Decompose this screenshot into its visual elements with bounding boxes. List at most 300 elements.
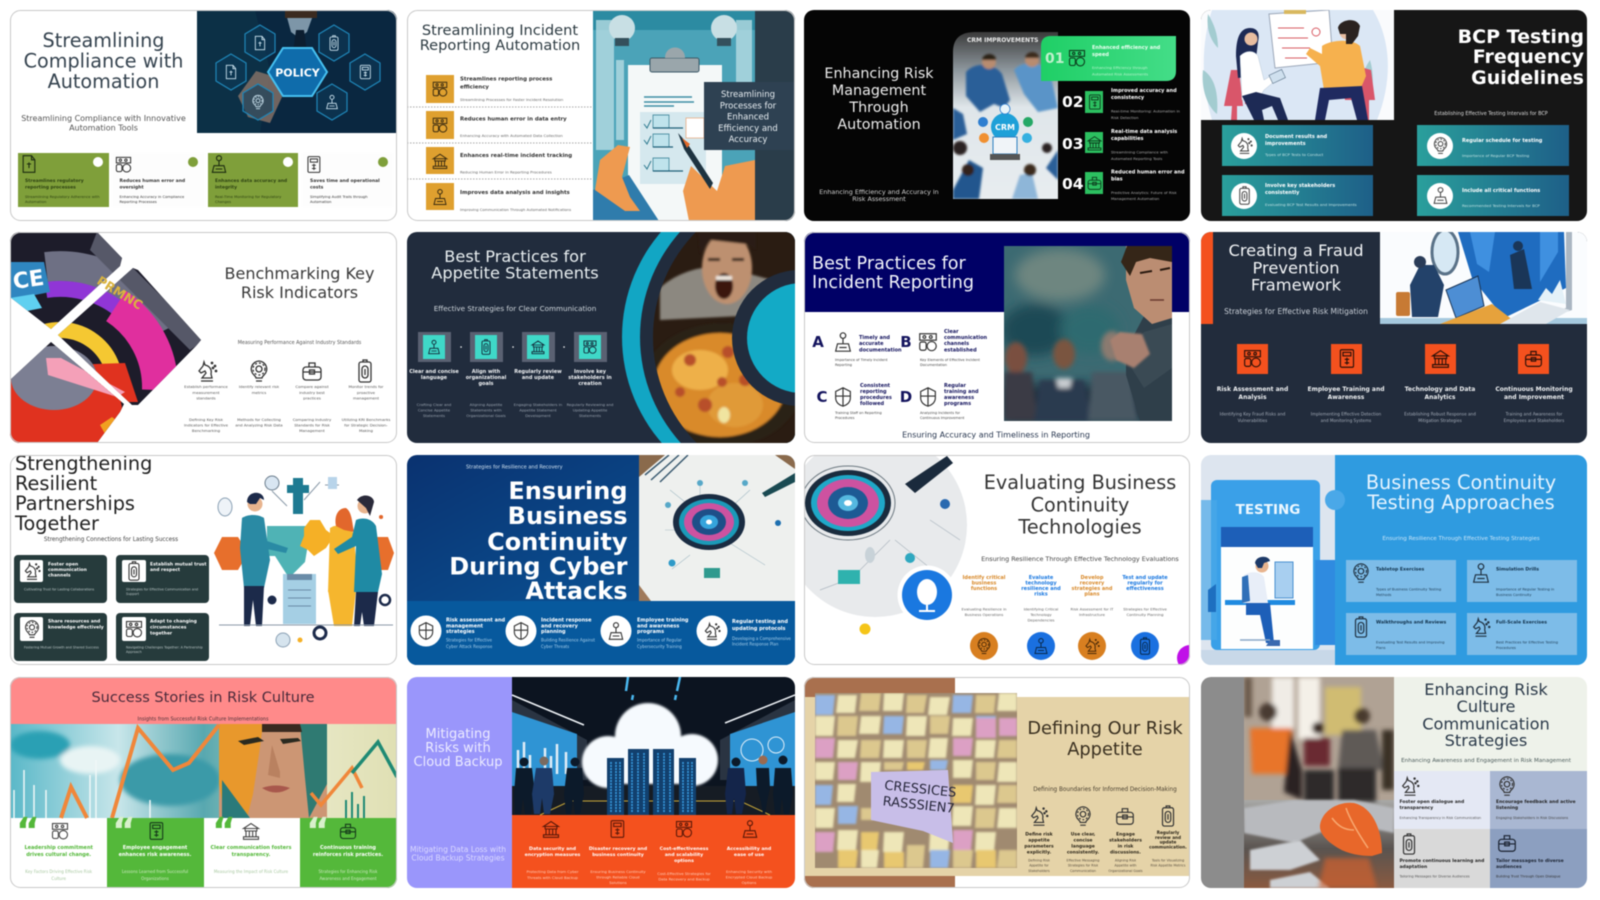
- column: regularly review: Tools for Visualizing: [1151, 858, 1184, 862]
- card: simulation: Simulation Drills: [1496, 566, 1539, 572]
- column: evaluate technology: Identifying Critical: [1024, 606, 1058, 612]
- subtitle: Strategies for Effective Risk Mitigation: [1224, 307, 1368, 316]
- column: critical functions: functions: [971, 586, 997, 592]
- row: data entry: [426, 111, 567, 139]
- column: stakeholders: stakeholders in: [568, 375, 612, 381]
- item 02: 02: [1062, 93, 1084, 111]
- column: review: Development: [525, 413, 551, 418]
- card: trust: [116, 555, 209, 603]
- quadrant: learning: [1398, 834, 1484, 878]
- card: critical functions: Recommended Testing Intervals for BCP: [1462, 203, 1540, 208]
- column: best practices: Compare against: [295, 384, 329, 389]
- column: engagement: Lessons Learned from Successful: [122, 869, 188, 874]
- title: Cloud Backup: [414, 755, 502, 770]
- column: define parameters: appetite: [1028, 838, 1050, 844]
- image: sticky notes: CRESSICES: [884, 778, 957, 801]
- card: adapt: Approach: [126, 650, 142, 654]
- card: regulatory reporting: [18, 153, 109, 207]
- column: recovery strategies: Risk Assessment for IT: [1071, 606, 1114, 612]
- item B: [900, 329, 988, 367]
- callout: Processes for: [720, 102, 777, 112]
- item 03: Real-time data analysis: [1111, 129, 1177, 135]
- card: full scale: Best Practices for Effective Testing: [1496, 640, 1558, 644]
- column: leadership: drives cultural change.: [26, 852, 91, 858]
- column: evaluate technology: Evaluate: [1029, 575, 1054, 581]
- column: monitor trends: [342, 360, 390, 433]
- item A: A: [812, 333, 824, 351]
- image: meeting with orange object: [1244, 677, 1394, 888]
- title: Reporting Automation: [420, 37, 580, 54]
- item 01: Automated Risk Assessments: [1092, 72, 1148, 76]
- title: Communication: [1422, 714, 1550, 734]
- icon: globe badge: [898, 566, 956, 624]
- column: engagement: Organizations: [141, 876, 169, 881]
- column: risk metrics: [235, 361, 283, 428]
- image: cloud data center: [512, 677, 795, 815]
- callout: Accuracy: [729, 135, 767, 145]
- panel: Enhancing Risk Management Through Automation: [804, 10, 1190, 221]
- column: test and update: effectiveness: [1126, 586, 1164, 592]
- item 02: Real-time Monitoring: Automation in: [1111, 108, 1181, 114]
- card: data accuracy: Changes: [215, 200, 231, 204]
- item D: Continuous Improvement: [920, 416, 965, 420]
- item: regular testing: [696, 616, 791, 646]
- item D: awareness: [944, 395, 974, 401]
- item C: procedures: [860, 395, 892, 401]
- column: training: [300, 811, 397, 888]
- column: disaster recovery: Disaster recovery and: [589, 846, 647, 852]
- card: adapt: circumstances: [150, 624, 187, 630]
- column: organizational goals: organizational: [466, 375, 507, 381]
- title: Risks with: [425, 741, 491, 756]
- column: regularly review: Regularly: [1157, 830, 1180, 835]
- item D: Regular: [944, 383, 966, 389]
- item: employee training: Cybersecurity Training: [637, 644, 682, 649]
- column: risk assessment: Vulnerabilities: [1238, 418, 1267, 423]
- panel: Evaluating Business Continuity Technologies: [783, 433, 1203, 671]
- column: performance standards: Establish performance: [184, 384, 228, 389]
- column: recovery strategies: recovery: [1080, 580, 1105, 586]
- column: data security: [525, 822, 581, 880]
- card: tabletop: Tabletop Exercises: [1376, 566, 1424, 572]
- column: performance standards: Benchmarking: [192, 428, 221, 433]
- column: clear language: Use clear,: [1071, 832, 1096, 838]
- image: face and charts: [10, 724, 397, 818]
- title: Attacks: [525, 577, 628, 605]
- item C: followed: [860, 401, 884, 407]
- column: technology: Analytics: [1425, 394, 1456, 401]
- subtitle: Mitigating Data Loss with: [410, 845, 506, 854]
- column: engage stakeholders: discussions.: [1110, 850, 1141, 856]
- column: risk metrics: and Analyzing Risk Data: [235, 422, 283, 428]
- item B: B: [900, 333, 912, 351]
- item: risk assessment: Risk assessment and: [446, 618, 506, 624]
- card: data accuracy: Enhances data accuracy and: [215, 178, 287, 184]
- panel: Benchmarking Key Risk Indicators: [0, 232, 397, 452]
- column: best practices: Standards for Risk: [294, 422, 331, 428]
- item 02: [1062, 88, 1181, 120]
- image: gauge: CE: [11, 266, 46, 295]
- card: data accuracy: Real-Time Monitoring for Regulatory: [215, 195, 282, 199]
- item 02: Risk Detection: [1111, 115, 1139, 120]
- column: monitor trends: Monitor trends for: [348, 384, 384, 389]
- title: Best Practices for: [444, 247, 586, 266]
- column: stakeholders: creation: [578, 381, 602, 387]
- column: data security: Protecting Data from Cyber: [526, 869, 579, 874]
- title: Testing Approaches: [1366, 491, 1555, 514]
- title: Automation: [48, 70, 159, 93]
- image: fraud investigation: [1380, 230, 1587, 324]
- label: CRM improvements: CRM IMPROVEMENTS: [967, 37, 1038, 44]
- item: risk assessment: strategies: [446, 629, 475, 635]
- item: risk assessment: management: [446, 624, 484, 630]
- item: employee training: and awareness: [637, 624, 679, 630]
- item 03: [1062, 129, 1177, 161]
- column: performance standards: standards: [196, 396, 216, 400]
- card: resources: knowledge effectively: [48, 624, 104, 630]
- column: engage stakeholders: [1108, 809, 1143, 873]
- quadrant: learning: Promote continuous learning and: [1400, 858, 1484, 864]
- row: incident tracking: [426, 147, 572, 174]
- panel: Success Stories in Risk Culture: [10, 677, 397, 888]
- callout: Streamlining: [721, 90, 775, 100]
- item 01: Enhancing Efficiency through: [1092, 65, 1148, 70]
- card: human error: Reporting Processes: [120, 200, 157, 204]
- card: human error: oversight: [120, 184, 144, 190]
- column: training: “: [306, 811, 330, 852]
- row: data analysis: [426, 183, 571, 212]
- card: simulation: [1467, 560, 1577, 602]
- column: data security: Threats with Cloud Backup: [526, 875, 578, 880]
- column: clear language: Communication: [1070, 869, 1096, 873]
- card: human error: [115, 156, 199, 204]
- title: Defining Our Risk: [1027, 718, 1183, 739]
- column: risk metrics: Methods for Collecting: [237, 417, 281, 422]
- column: training: Continuous training: [320, 845, 376, 851]
- card: stakeholders: Involve key stakeholders: [1265, 183, 1335, 189]
- quadrant: open dialogue: Enhancing Transparency in Risk Communication: [1400, 816, 1481, 820]
- row: incident tracking: Reducing Human Error in Reporting Procedures: [460, 170, 552, 174]
- title: Benchmarking Key: [225, 264, 374, 283]
- column: employee training: Awareness: [1328, 394, 1365, 401]
- image: consultation illustration: [1201, 10, 1394, 120]
- image: man pointing: [1001, 246, 1172, 421]
- item 01: speed: [1092, 52, 1109, 58]
- title: Through: [848, 100, 909, 116]
- card: resources: [14, 613, 107, 661]
- card: trust: Strategies for Effective Communication and: [126, 588, 198, 592]
- column: organizational goals: Align with: [472, 369, 501, 375]
- item: employee training: Importance of Regular: [637, 638, 682, 642]
- card: regulatory reporting: Streamlines regulatory: [25, 178, 84, 184]
- card: trust: and respect: [150, 567, 181, 573]
- column: review: Appetite Statement: [519, 408, 557, 412]
- image: CRM meeting: [953, 32, 1058, 199]
- item B: channels: [944, 341, 969, 347]
- item A: Reporting: [835, 363, 852, 367]
- column: clear language: Effective Messaging: [1067, 858, 1099, 862]
- card: data accuracy: [208, 153, 298, 207]
- column: clear language: Clear and concise: [409, 369, 459, 375]
- item: incident response: and recovery: [541, 624, 579, 630]
- card: operational costs: [306, 155, 389, 204]
- item A: [812, 333, 902, 367]
- column: clear language: Strategies for Risk: [1068, 864, 1098, 868]
- column: data security: encryption measures: [525, 852, 581, 858]
- illustration: testing kiosk: [1201, 480, 1345, 665]
- panel: Creating a Fraud Prevention Framework: [1201, 230, 1587, 443]
- panel: Streamlining Incident Reporting Automation: [407, 10, 795, 221]
- title: Risk Indicators: [241, 283, 358, 302]
- column: recovery strategies: Infrastructure: [1079, 612, 1106, 617]
- item A: Importance of Timely Incident: [835, 358, 888, 362]
- column: monitoring: Employees and Stakeholders: [1504, 418, 1564, 423]
- card: stakeholders: [1222, 175, 1373, 216]
- title: Strengthening: [15, 452, 152, 475]
- item D: [900, 383, 979, 420]
- panel: Enhancing Risk Culture Communication Strategies: [1201, 677, 1587, 888]
- title: Business Continuity: [1366, 471, 1556, 494]
- card: full scale: Procedures: [1496, 646, 1516, 650]
- title: Enhancing Risk: [824, 66, 934, 82]
- column: regularly review: review and: [1155, 835, 1181, 840]
- column: engagement: “: [112, 811, 136, 852]
- title: Evaluating Business: [984, 471, 1176, 494]
- subtitle: Insights from Successful Risk Culture Implementations: [138, 716, 269, 722]
- title: Culture: [1457, 697, 1515, 716]
- column: leadership: Culture: [51, 876, 67, 881]
- card: document results: improvements: [1265, 141, 1306, 147]
- row dividers: [407, 107, 593, 179]
- card: communication: channels: [48, 572, 71, 578]
- panel: Ensuring Business Continuity During Cyber Attacks: [407, 455, 795, 665]
- quadrant: learning: Tailoring Messages for Diverse Audiences: [1398, 874, 1470, 878]
- column: evaluate technology: [1021, 575, 1061, 660]
- quadrant: feedback: [1496, 777, 1576, 820]
- card: stakeholders: Evaluating BCP Test Results and Improvements: [1265, 202, 1357, 207]
- item A: documentation: [859, 348, 902, 354]
- column: evaluate technology: resilience and: [1021, 586, 1061, 592]
- title: Streamlining Incident: [422, 22, 578, 39]
- column: regularly review: communication.: [1149, 844, 1187, 850]
- quadrant: tailor messages: [1496, 836, 1564, 878]
- item C: Consistent: [860, 383, 891, 389]
- column: disaster recovery: through Reliable Cloud: [596, 874, 640, 880]
- column: critical functions: Identify critical: [963, 575, 1006, 581]
- column: monitoring: [1495, 344, 1573, 423]
- column: cost effectiveness: [657, 822, 711, 882]
- column: engage stakeholders: Organizational Goals: [1108, 869, 1143, 873]
- item: regular testing: Incident Response Plan: [732, 642, 779, 646]
- item: risk assessment: [410, 616, 506, 649]
- card: regular schedule: Importance of Regular BCP Testing: [1462, 153, 1530, 158]
- panel: Best Practices for Incident Reporting: [804, 232, 1190, 443]
- column: communication: [210, 811, 292, 874]
- column: cost effectiveness: Cost-effectiveness: [660, 846, 709, 852]
- column: organizational goals: Statements with: [470, 408, 502, 412]
- image: policy hexagons: [197, 10, 397, 133]
- image: teal ring and food photo: [622, 176, 956, 498]
- column: clear language: [1067, 807, 1099, 873]
- quadrant: tailor messages: Building Trust Through Open Dialogue: [1496, 874, 1560, 878]
- column: risk assessment: Analysis: [1238, 394, 1267, 401]
- image: sticky notes: [815, 693, 1017, 868]
- column: best practices: Comparing Industry: [293, 417, 332, 422]
- title: Continuity: [1031, 494, 1129, 516]
- column: clear language: [409, 332, 459, 418]
- column: communication: “: [212, 811, 236, 852]
- title: Continuity: [487, 528, 628, 556]
- card: simulation: Business Continuity: [1496, 593, 1532, 597]
- item: employee training: Employee training: [637, 618, 689, 624]
- column: define parameters: Stakeholders: [1028, 869, 1050, 873]
- item: regular testing: Developing a Comprehensive: [732, 636, 791, 641]
- column: define parameters: Appetite for: [1029, 864, 1049, 868]
- quadrant: feedback: Encourage feedback and active: [1496, 799, 1576, 805]
- column: stakeholders: Updating Appetite: [573, 408, 608, 412]
- column: disaster recovery: business continuity: [592, 852, 644, 858]
- column: monitor trends: Utilizing KRI Benchmarks: [342, 417, 390, 422]
- card: regular schedule: Regular schedule for testing: [1462, 138, 1543, 144]
- card: operational costs: Saves time and operational: [310, 178, 380, 184]
- column: clear language: Concise Appetite: [418, 408, 451, 412]
- column: critical functions: Business Operations: [965, 612, 1003, 617]
- subtitle: Automation Tools: [69, 124, 138, 132]
- column: engage stakeholders: Aligning Risk: [1115, 858, 1136, 862]
- column: clear language: concise: [1074, 838, 1092, 844]
- title: BCP Testing: [1458, 26, 1584, 48]
- column: review: Engaging Stakeholders in: [514, 402, 563, 407]
- title: Resilient: [15, 472, 98, 495]
- column: risk metrics: metrics: [252, 390, 266, 395]
- image: clipboard with hands: [593, 10, 795, 221]
- column: accessibility: [726, 821, 773, 885]
- title: Incident Reporting: [812, 273, 974, 293]
- item B: Key Elements of Effective Incident: [920, 358, 980, 362]
- item A: accurate: [859, 341, 884, 347]
- item: incident response: Building Resilience Against: [541, 638, 595, 642]
- column: accessibility: Enhancing Security with: [726, 869, 773, 874]
- item 04: Predictive Analytics: Future of Risk: [1111, 190, 1177, 195]
- column: engagement: Employee engagement: [123, 845, 188, 851]
- item D: D: [900, 388, 912, 406]
- item 04: [1062, 170, 1185, 201]
- row: data entry: Reduces human error in data entry: [460, 116, 567, 122]
- subtitle: Strengthening Connections for Lasting Success: [44, 537, 178, 543]
- card: document results: [1222, 125, 1373, 166]
- column: stakeholders: Regularly Reviewing and: [567, 402, 614, 407]
- column: review: [514, 332, 563, 418]
- item D: training and: [944, 389, 979, 395]
- item: risk assessment: Cyber Attack Response: [446, 644, 493, 649]
- column: engagement: enhances risk awareness.: [119, 852, 191, 858]
- image: sticky notes: RASSSIEN7: [882, 794, 955, 817]
- image: target on paper: [639, 455, 795, 601]
- column: evaluate technology: Technology: [1029, 612, 1052, 617]
- column: training: Awareness and Engagement: [319, 876, 377, 881]
- card: tabletop: Methods: [1376, 593, 1391, 597]
- item D: Analyzing Incidents for: [920, 411, 961, 415]
- card: tabletop: [1346, 560, 1456, 602]
- column: engage stakeholders: Appetite with: [1114, 864, 1137, 868]
- column: organizational goals: Aligning Appetite: [470, 402, 503, 407]
- decorative dots: [860, 624, 1203, 671]
- item 04: Reduced human error and: [1111, 170, 1185, 176]
- column: organizational goals: Organizational Goals: [466, 413, 506, 418]
- card: trust: Support: [126, 592, 140, 596]
- column: leadership: Key Factors Driving Effective Risk: [25, 869, 93, 874]
- title: Business: [508, 502, 628, 530]
- column: disaster recovery: Solutions: [609, 880, 627, 885]
- card: tabletop: Types of Business Continuity Testing: [1375, 588, 1441, 592]
- subtitle: Streamlining Compliance with Innovative: [21, 114, 186, 123]
- column: stakeholders: [567, 332, 614, 418]
- title: Management: [832, 83, 926, 99]
- column: engage stakeholders: Engage: [1116, 832, 1135, 838]
- title: Compliance with: [24, 50, 183, 72]
- column: cost effectiveness: Data Recovery and Backup: [658, 876, 710, 882]
- column: communication: Measuring the Impact of Risk Culture: [214, 869, 289, 874]
- item 02: consistency: [1111, 95, 1145, 101]
- title: Appetite: [1067, 739, 1143, 760]
- subtitle: Enhancing Awareness and Engagement in Risk Management: [1401, 758, 1572, 764]
- callout: Enhanced: [727, 112, 769, 122]
- card: regular schedule: [1417, 125, 1569, 166]
- column: recovery strategies: strategies and: [1072, 586, 1113, 592]
- column: best practices: industry best: [299, 390, 325, 395]
- column: stakeholders: Involve key: [574, 369, 607, 375]
- title: Prevention: [1252, 258, 1340, 278]
- column: training: reinforces risk practices.: [313, 852, 383, 858]
- item D: programs: [944, 401, 971, 407]
- panel: Defining Our Risk Appetite: [804, 677, 1190, 888]
- column: organizational goals: goals: [478, 381, 494, 387]
- column: accessibility: Encrypted Cloud Backup: [726, 874, 773, 880]
- title: Mitigating: [426, 727, 490, 742]
- title: Enhancing Risk: [1424, 680, 1548, 699]
- title: Technologies: [1017, 516, 1142, 538]
- column: cost effectiveness: and scalability: [665, 852, 703, 858]
- illustration: partners handshake: [214, 476, 394, 647]
- image: gauge: [0, 232, 205, 452]
- column: employee training: [1307, 344, 1385, 423]
- column: review: Regularly review: [514, 369, 562, 375]
- card: critical functions: [1417, 175, 1569, 216]
- item: employee training: programs: [637, 629, 664, 635]
- item 04: bias: [1111, 176, 1123, 182]
- column: technology: Establishing Robust Response and: [1404, 412, 1476, 416]
- column: performance standards: Defining Key Risk: [189, 417, 224, 422]
- item 03: Streamlining Compliance with: [1111, 150, 1169, 154]
- column: cost effectiveness: Cost-Effective Strategies for: [657, 871, 711, 876]
- item: risk assessment: Strategies for Effective: [446, 638, 492, 642]
- column: define parameters: parameters: [1024, 844, 1054, 850]
- column: evaluate technology: Dependencies: [1027, 618, 1055, 622]
- item: employee training: [600, 616, 689, 649]
- column: monitoring: and Improvement: [1504, 394, 1564, 401]
- card: walkthroughs: Plans: [1376, 646, 1386, 650]
- column: recovery strategies: plans: [1084, 592, 1100, 598]
- quadrant: open dialogue: Foster open dialogue and: [1400, 799, 1464, 805]
- subtitle: Effective Strategies for Clear Communication: [434, 304, 596, 313]
- title: Automation: [837, 117, 921, 133]
- card: communication: Foster open: [48, 562, 78, 568]
- item 03: Automated Reporting Tools: [1111, 156, 1162, 161]
- item 01: [1041, 36, 1176, 81]
- column: risk assessment: [1217, 344, 1288, 423]
- column: clear language: language: [1071, 844, 1095, 850]
- item C: Procedures: [835, 416, 855, 420]
